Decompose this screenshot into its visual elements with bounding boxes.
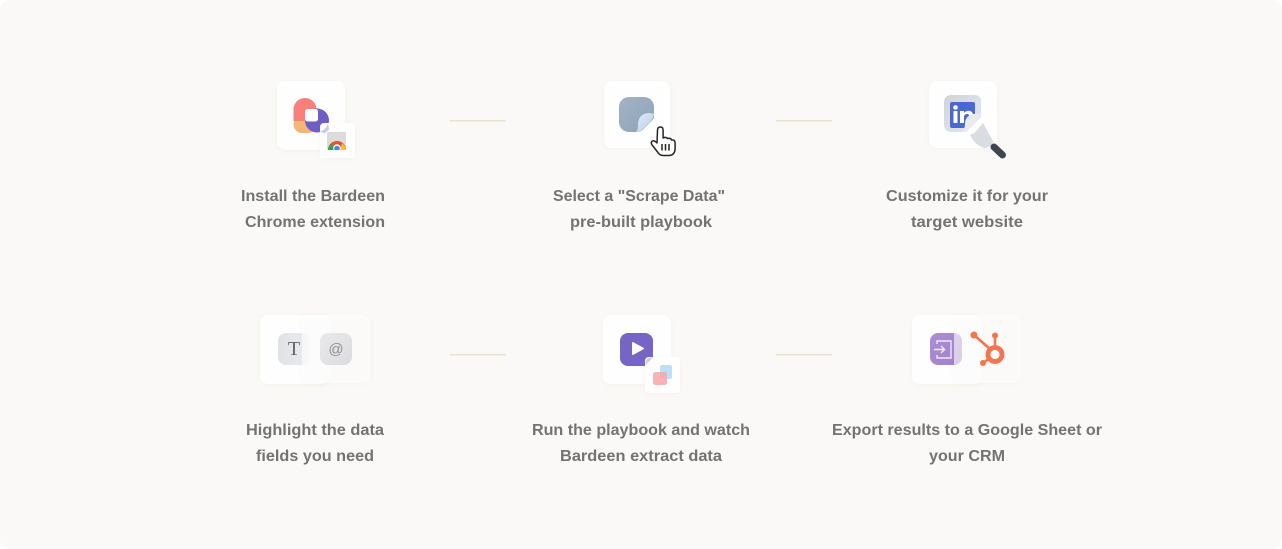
step 3 label: target website xyxy=(911,214,1023,231)
step 1: install extension xyxy=(241,81,385,231)
step 1 label: Install the Bardeen xyxy=(241,188,385,205)
connector: step 4 to 5 xyxy=(450,354,506,356)
step 5 label xyxy=(532,422,750,465)
step 5 label: Bardeen extract data xyxy=(560,448,722,465)
icon: email field card: @ xyxy=(328,341,344,358)
icon: LinkedIn sticker card xyxy=(929,81,997,148)
step 6 label: Export results to a Google Sheet or xyxy=(832,422,1102,439)
step 4 label xyxy=(246,422,384,465)
icon: Chrome store badge xyxy=(320,123,355,158)
step 2: select playbook xyxy=(553,81,725,231)
step 6: export results xyxy=(832,315,1102,465)
step 4 label: Highlight the data xyxy=(246,422,384,439)
step 1 label: Chrome extension xyxy=(245,214,385,231)
step 4: highlight fields xyxy=(246,315,384,465)
icon: scraper tool xyxy=(970,123,1002,155)
step 6 label: your CRM xyxy=(929,448,1005,465)
step 5 label: Run the playbook and watch xyxy=(532,422,750,439)
step 6 label xyxy=(832,422,1102,465)
icon: Bardeen logo card xyxy=(277,81,345,150)
icon: HubSpot card xyxy=(954,315,1021,383)
icon: sticker card xyxy=(604,81,670,148)
icon: text field card: T xyxy=(288,338,300,360)
icon: text field card xyxy=(260,315,330,384)
step 5: run playbook xyxy=(532,315,750,465)
step 2 label: Select a "Scrape Data" xyxy=(553,188,725,205)
step 2 label: pre-built playbook xyxy=(570,214,712,231)
icon: export card xyxy=(912,315,982,384)
connector: step 5 to 6 xyxy=(776,354,832,356)
step 2 label xyxy=(553,188,725,231)
step 3: customize xyxy=(886,81,1048,231)
step 4 label: fields you need xyxy=(256,448,374,465)
icon: email field card xyxy=(302,315,370,383)
step 3 label: Customize it for your xyxy=(886,188,1048,205)
step 3 label xyxy=(886,188,1048,231)
connector: step 1 to 2 xyxy=(450,120,506,122)
icon: data badge xyxy=(645,357,680,393)
step 1 label xyxy=(241,188,385,231)
icon: play card xyxy=(603,315,671,384)
connector: step 2 to 3 xyxy=(776,120,832,122)
icon: hand cursor xyxy=(651,127,675,156)
